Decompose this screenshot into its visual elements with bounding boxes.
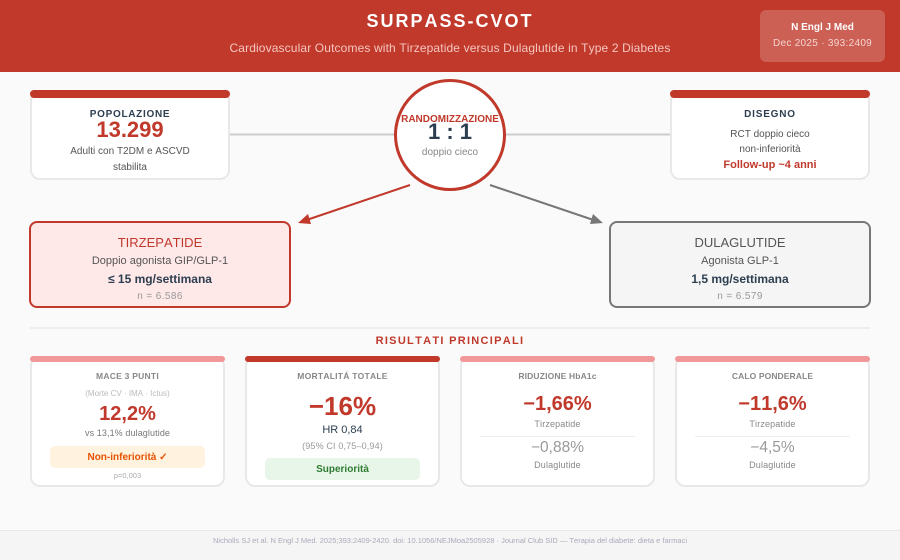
panel: disegno xyxy=(670,90,870,180)
journal badge xyxy=(760,10,885,62)
card top bar xyxy=(30,356,225,362)
ratio: 1 : 1 xyxy=(428,119,472,144)
heading: DISEGNO xyxy=(744,109,796,120)
panel: mortalità totale xyxy=(245,356,440,487)
panel: popolazione xyxy=(30,90,230,180)
panel: dulaglutide arm xyxy=(609,221,871,308)
tirzepatide label: Tirzepatide xyxy=(749,419,796,429)
tirzepatide value: −11,6% xyxy=(738,393,807,415)
tirzepatide label: Tirzepatide xyxy=(534,419,581,429)
dose: ≤ 15 mg/settimana xyxy=(108,272,212,286)
sample size: n = 6.586 xyxy=(137,291,183,302)
result pill: Superiorità xyxy=(316,464,369,475)
journal name: N Engl J Med xyxy=(791,22,854,33)
panel: randomizzazione xyxy=(394,79,506,191)
heading: MACE 3 PUNTI xyxy=(96,371,159,381)
footer xyxy=(0,530,900,560)
heading: CALO PONDERALE xyxy=(732,371,813,381)
heading: MORTALITÁ TOTALE xyxy=(297,371,388,381)
card top bar xyxy=(670,90,870,98)
panel: riduzione HbA1c xyxy=(460,356,655,487)
dulaglutide label: Dulaglutide xyxy=(534,460,581,470)
big number: 13.299 xyxy=(96,117,164,142)
comparator: vs 13,1% dulaglutide xyxy=(85,428,170,438)
panel: calo ponderale xyxy=(675,356,870,487)
dulaglutide value: −4,5% xyxy=(750,439,795,456)
confidence interval: (95% CI 0,75–0,94) xyxy=(302,441,383,451)
dulaglutide value: −0,88% xyxy=(531,439,584,456)
arm name: TIRZEPATIDE xyxy=(118,235,202,250)
connector lines and arrows xyxy=(230,134,670,224)
sample size: n = 6.579 xyxy=(717,291,763,302)
description: non-inferiorità xyxy=(739,144,801,155)
journal date: Dec 2025 · 393:2409 xyxy=(773,38,872,49)
description: RCT doppio cieco xyxy=(730,129,810,140)
subtitle: Cardiovascular Outcomes with Tirzepatide versus Dulaglutide in Type 2 Diabetes xyxy=(229,41,670,55)
citation: Nicholls SJ et al. N Engl J Med. 2025;393:2409-2420. doi: 10.1056/NEJMoa2505928 · Journal Club SID — Terapia del diabete: dieta e farmaci xyxy=(213,536,687,545)
hazard ratio: HR 0,84 xyxy=(322,424,363,436)
dulaglutide label: Dulaglutide xyxy=(749,460,796,470)
value: −16% xyxy=(309,391,376,421)
header banner xyxy=(0,0,900,72)
title: SURPASS-CVOT xyxy=(366,11,534,31)
panel: MACE xyxy=(30,356,225,487)
description xyxy=(70,146,190,173)
description xyxy=(730,129,810,155)
result pill: Non-inferiorità ✓ xyxy=(87,452,168,463)
mechanism: Doppio agonista GIP/GLP-1 xyxy=(92,255,228,267)
heading: POPOLAZIONE xyxy=(90,109,170,120)
arm name: DULAGLUTIDE xyxy=(694,235,786,250)
card top bar xyxy=(30,90,230,98)
result pill xyxy=(50,446,205,468)
separator xyxy=(695,436,850,437)
card top bar xyxy=(245,356,440,362)
card top bar xyxy=(675,356,870,362)
result pill xyxy=(265,458,420,480)
dose: 1,5 mg/settimana xyxy=(691,272,789,286)
components: (Morte CV · IMA · Ictus) xyxy=(85,389,170,398)
panel: tirzepatide arm xyxy=(29,221,291,308)
value: 12,2% xyxy=(99,403,156,425)
heading: RIDUZIONE HbA1c xyxy=(518,371,597,381)
description: Adulti con T2DM e ASCVD xyxy=(70,146,190,157)
separator xyxy=(480,436,635,437)
description: stabilita xyxy=(113,162,147,173)
card top bar xyxy=(460,356,655,362)
p value: p=0,003 xyxy=(114,471,141,480)
section heading: RISULTATI PRINCIPALI xyxy=(376,335,524,347)
mechanism: Agonista GLP-1 xyxy=(701,255,779,267)
blinding label: doppio cieco xyxy=(422,147,478,158)
tirzepatide value: −1,66% xyxy=(523,393,592,415)
follow-up: Follow-up ~4 anni xyxy=(723,159,817,171)
heading: RANDOMIZZAZIONE xyxy=(401,114,499,125)
